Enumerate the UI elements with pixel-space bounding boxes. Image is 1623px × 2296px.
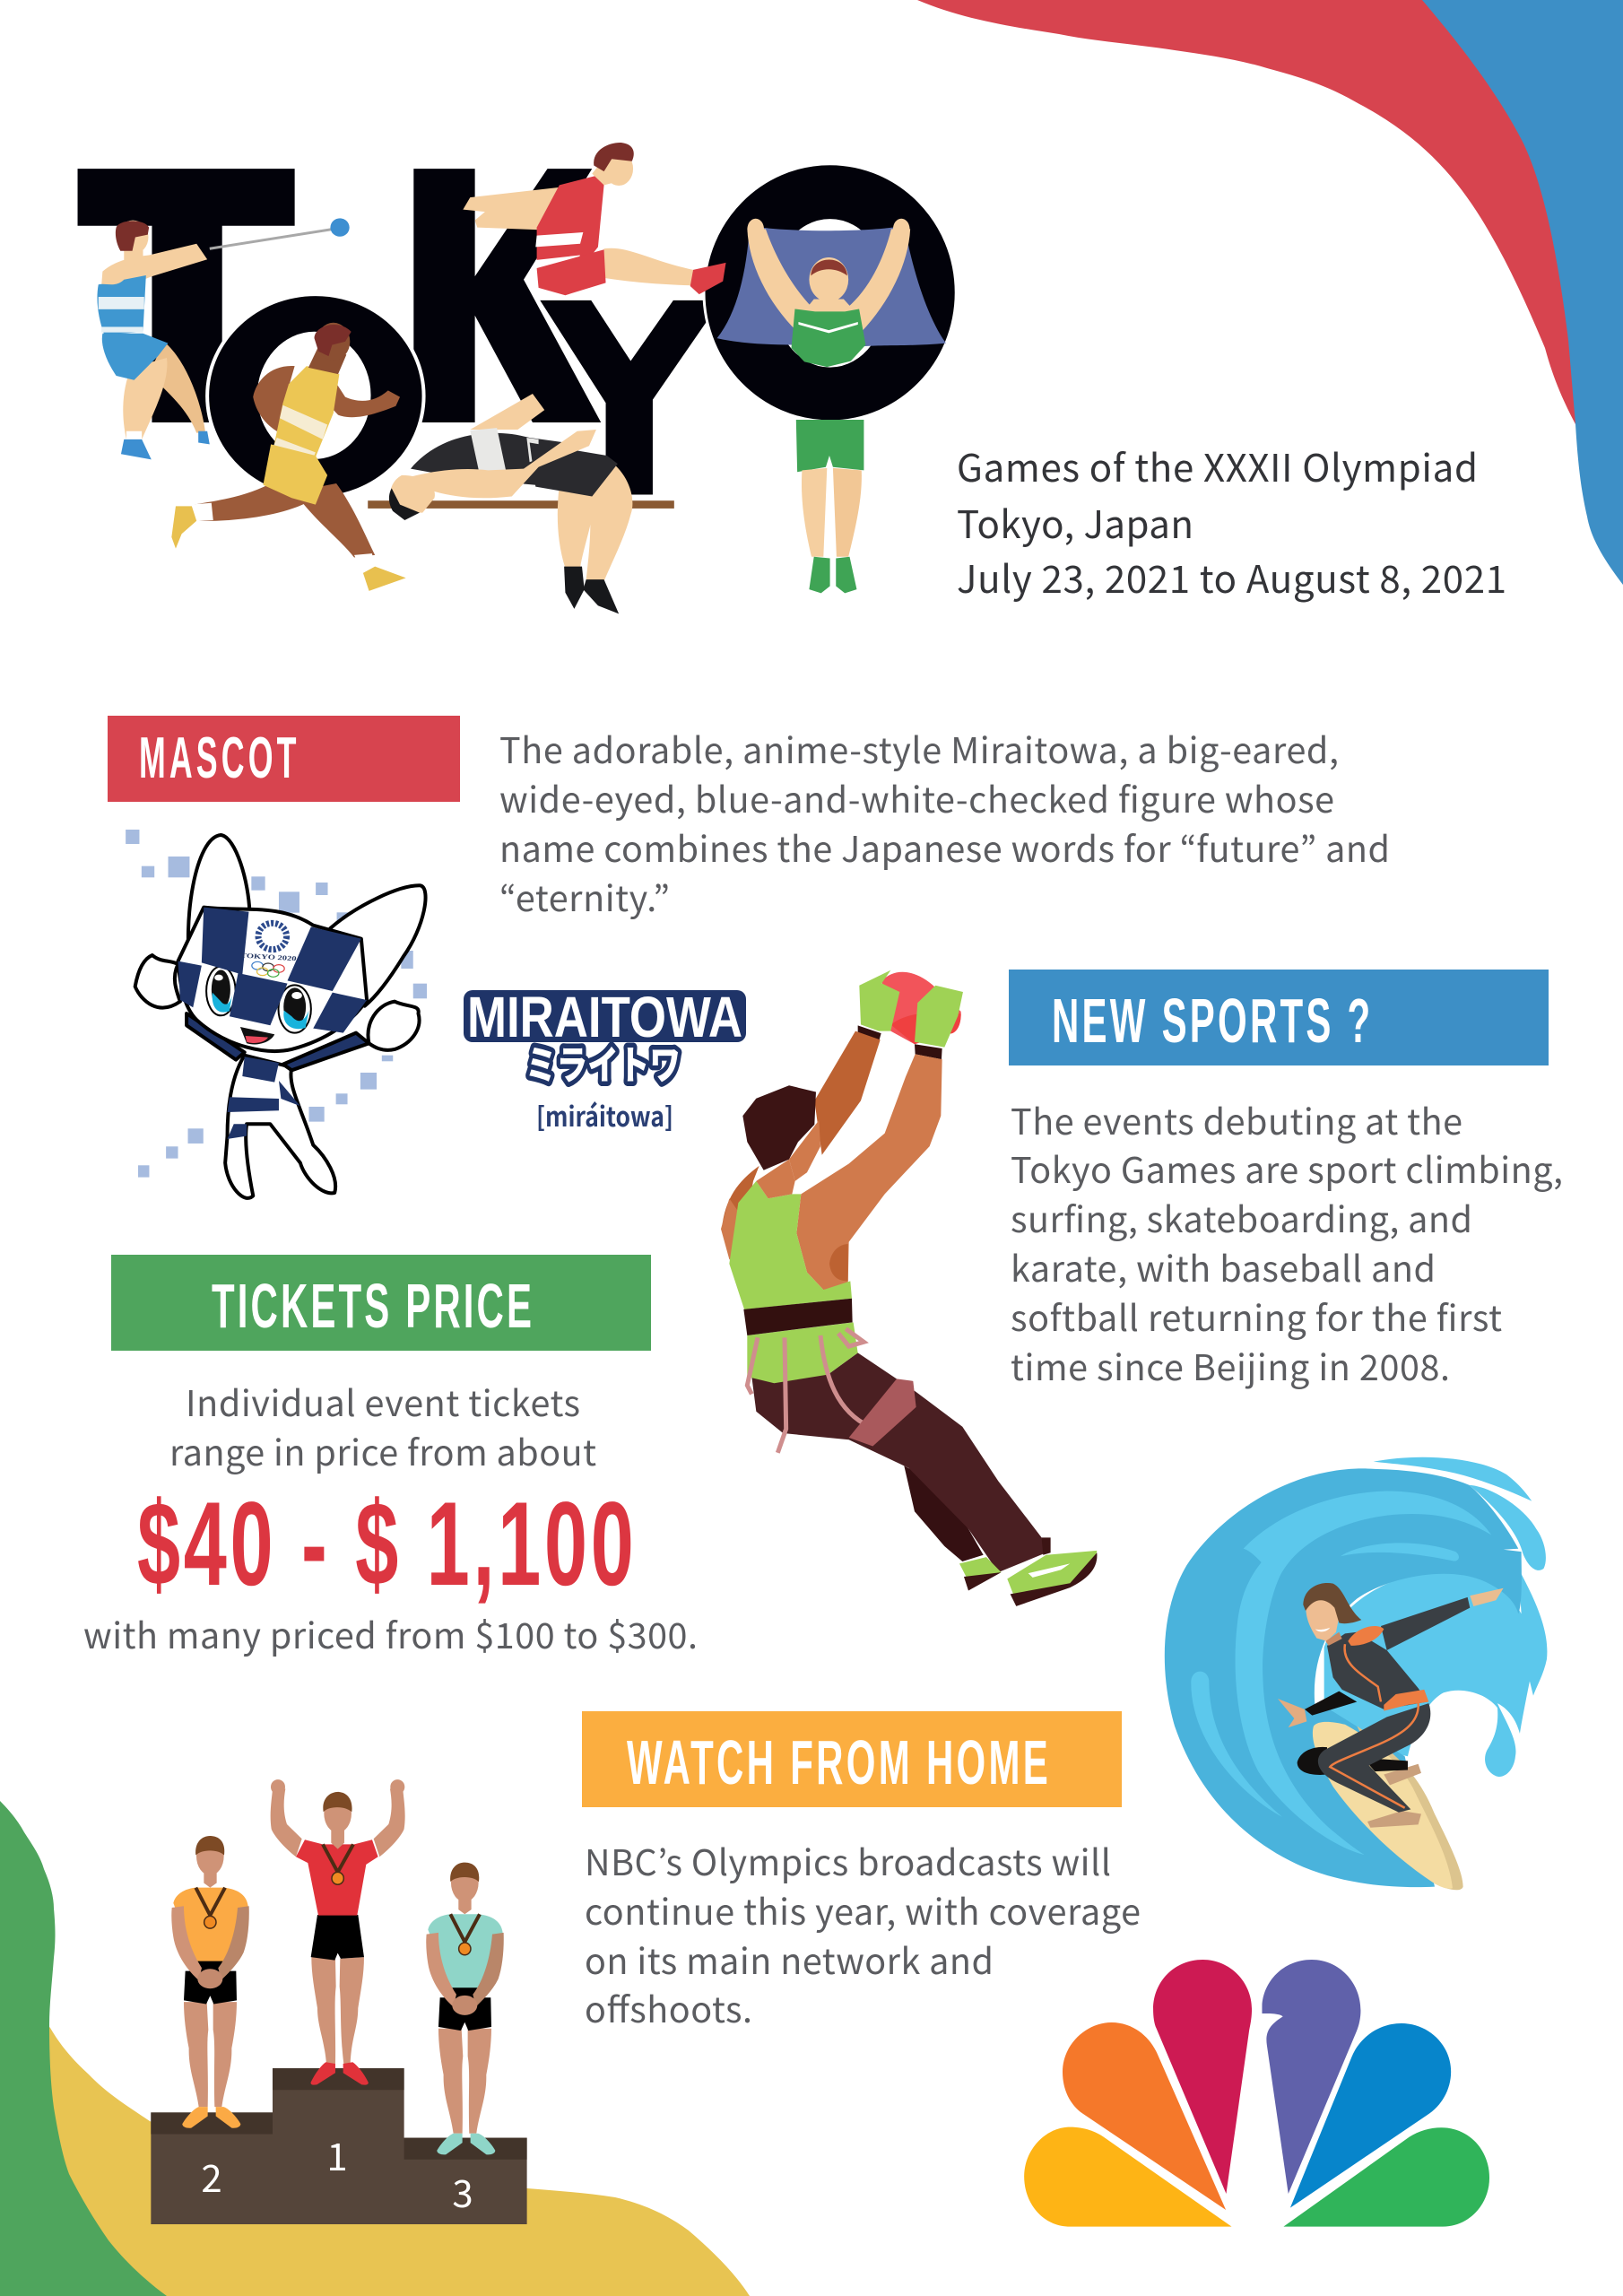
background: blue corner wave bbox=[1399, 0, 1623, 585]
watch from home description: on its main network and bbox=[585, 1934, 994, 1985]
singlet bbox=[729, 1181, 852, 1309]
ticket price note: with many priced from $100 to $300. bbox=[83, 1608, 698, 1659]
new sports description: time since Beijing in 2008. bbox=[1011, 1340, 1450, 1391]
pants bbox=[904, 1465, 984, 1561]
letter T bbox=[78, 169, 295, 422]
tickets description: Individual event tickets bbox=[186, 1376, 580, 1427]
medalist: first place bbox=[271, 1779, 405, 2085]
mascot logotype: [miráitowa] bbox=[536, 1095, 673, 1135]
climbing hold bbox=[881, 972, 961, 1044]
climber illustration bbox=[721, 970, 1097, 1606]
letter O (last) bbox=[704, 164, 956, 422]
podium numbers bbox=[201, 2127, 473, 2219]
new sports description: karate, with baseball and bbox=[1011, 1241, 1436, 1292]
letter Y bbox=[537, 299, 725, 496]
event details text bbox=[957, 439, 1506, 604]
surfer bbox=[1384, 1764, 1421, 1785]
podium numbers: 2 bbox=[201, 2149, 222, 2204]
watch from home description: offshoots. bbox=[585, 1982, 752, 2033]
medalist: second place bbox=[171, 1836, 249, 2128]
harness bbox=[747, 1329, 870, 1453]
mouth bbox=[240, 1027, 274, 1045]
letter K bbox=[413, 169, 601, 422]
eyes bbox=[206, 967, 311, 1033]
new sports description: softball returning for the first bbox=[1011, 1291, 1502, 1342]
panel: tickets price heading bbox=[111, 1255, 651, 1351]
mascot illustration: Miraitowa: TOKYO 2020 bbox=[240, 952, 298, 962]
podium with medalists bbox=[151, 1779, 527, 2224]
mascot logotype: ミライトワ bbox=[525, 1044, 681, 1088]
NBC peacock logo bbox=[1024, 1960, 1489, 2227]
mascot description: wide-eyed, blue-and-white-checked figure whose bbox=[499, 772, 1334, 823]
new sports description: Tokyo Games are sport climbing, bbox=[1011, 1143, 1563, 1194]
panel: tickets price heading: TICKETS PRICE bbox=[212, 1272, 532, 1342]
podium blocks bbox=[151, 2068, 527, 2224]
athlete: high jumper bbox=[368, 394, 674, 613]
belt bbox=[743, 1299, 853, 1335]
wave highlights bbox=[1236, 1492, 1491, 1855]
wave spray bbox=[1374, 1457, 1532, 1501]
mascot description: name combines the Japanese words for “future” and bbox=[499, 822, 1390, 873]
mascot description: The adorable, anime-style Miraitowa, a big-eared, bbox=[499, 723, 1339, 774]
watch from home description: continue this year, with coverage bbox=[585, 1884, 1141, 1935]
panel: watch from home heading: WATCH FROM HOME bbox=[627, 1728, 1048, 1798]
new sports description bbox=[1011, 1094, 1563, 1391]
panel: mascot heading bbox=[108, 716, 460, 802]
new sports description: The events debuting at the bbox=[1011, 1094, 1462, 1145]
mascot logotype bbox=[464, 985, 746, 1135]
mascot logotype: MIRAITOWA bbox=[467, 985, 742, 1049]
face checker panels bbox=[178, 908, 367, 1033]
panel: new sports heading bbox=[1009, 970, 1549, 1065]
mascot illustration: Miraitowa bbox=[126, 830, 427, 1198]
wave body bbox=[1165, 1468, 1522, 1887]
podium numbers: 1 bbox=[326, 2127, 348, 2182]
athlete: man with towel bbox=[717, 219, 946, 593]
panel: new sports heading: NEW SPORTS ? bbox=[1052, 987, 1370, 1057]
ticket price range: $40 - $ 1,100 bbox=[137, 1476, 634, 1610]
shoes bbox=[959, 1557, 1002, 1581]
emblem bbox=[258, 923, 287, 950]
panel: mascot heading: MASCOT bbox=[139, 726, 296, 791]
wave interior bbox=[1324, 1569, 1547, 1777]
athlete: runner bbox=[171, 323, 406, 591]
mascot description: “eternity.” bbox=[499, 871, 670, 922]
new sports description: surfing, skateboarding, and bbox=[1011, 1192, 1472, 1243]
mascot description bbox=[499, 723, 1390, 922]
watch from home description bbox=[585, 1835, 1141, 2033]
watch from home description: NBC’s Olympics broadcasts will bbox=[585, 1835, 1111, 1886]
background: green bottom-left wave bbox=[0, 1801, 167, 2296]
background: red corner wave bbox=[917, 0, 1575, 424]
gloves bbox=[859, 970, 899, 1031]
event details text: Games of the XXXII Olympiad bbox=[957, 439, 1478, 493]
surfboard bbox=[1357, 1726, 1463, 1890]
background: yellow bottom-left wave bbox=[0, 1973, 750, 2296]
title artwork: TOKYO with athletes bbox=[78, 143, 956, 613]
athlete: hurdler in red bbox=[463, 143, 726, 295]
athlete: hammer thrower bbox=[97, 218, 350, 459]
arms and back bbox=[814, 1031, 881, 1155]
pixel squares bbox=[126, 830, 427, 1178]
event details text: Tokyo, Japan bbox=[957, 495, 1193, 550]
tickets description: range in price from about bbox=[169, 1425, 596, 1476]
panel: watch from home heading bbox=[582, 1711, 1122, 1807]
surfer illustration bbox=[1165, 1457, 1547, 1890]
medalist: third place bbox=[426, 1863, 504, 2154]
letter O (first) bbox=[207, 294, 424, 498]
event details text: July 23, 2021 to August 8, 2021 bbox=[957, 550, 1506, 604]
hair and face bbox=[789, 1120, 820, 1181]
tickets description bbox=[169, 1376, 596, 1476]
podium numbers: 3 bbox=[452, 2164, 473, 2219]
